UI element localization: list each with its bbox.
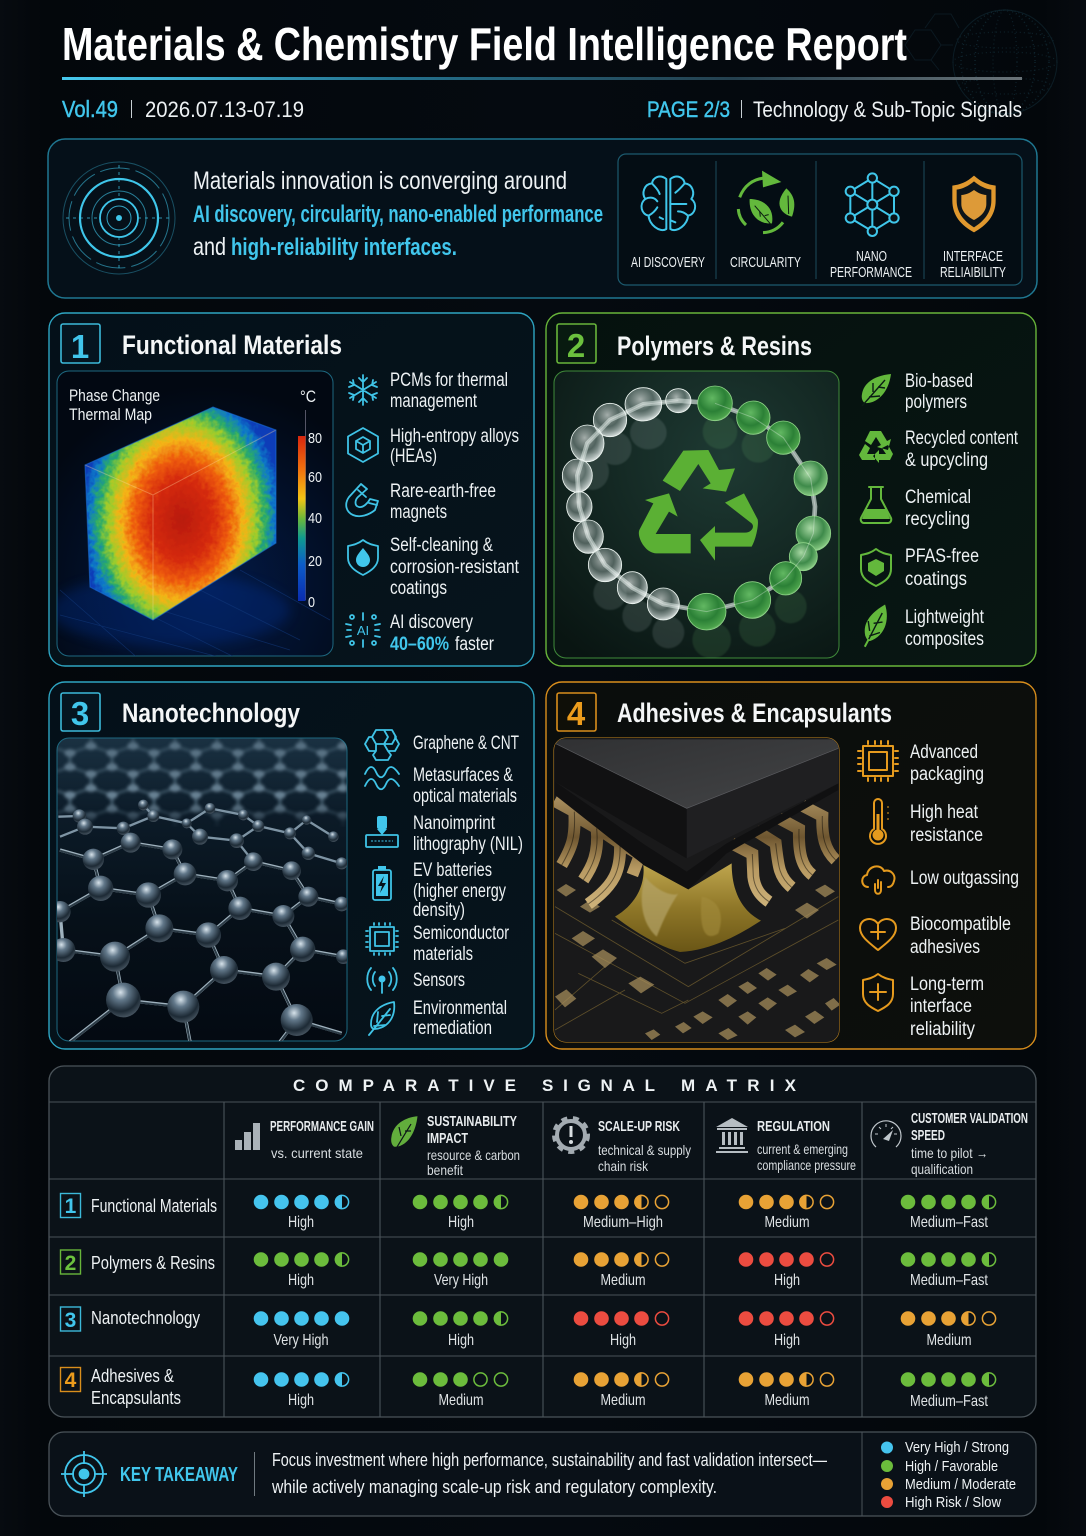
text: environmental: Environmental — [413, 998, 507, 1019]
title: Materials & Chemistry Field Intelligence Report — [62, 18, 907, 70]
label: circularity: CIRCULARITY — [730, 255, 801, 271]
color scale legend: 80 — [308, 430, 322, 447]
column header: scale-up risk — [554, 1118, 691, 1174]
text: metasurfaces: Metasurfaces & — [413, 765, 513, 786]
meta line: volume and date: Vol.49 — [62, 96, 118, 122]
text: AI discovery — [390, 612, 495, 655]
row: Polymers & Resins: Very High — [434, 1272, 488, 1289]
icon: leaf — [862, 374, 891, 406]
icon: waves — [365, 767, 399, 789]
number badge 4 — [557, 693, 596, 732]
text: composites — [905, 607, 985, 650]
text: high heat: High heat — [910, 802, 979, 823]
row: Adhesives & Encapsulants: High — [288, 1392, 314, 1409]
number badge 2 — [557, 324, 596, 364]
text: recycled: Recycled content — [905, 428, 1019, 449]
summary text: Materials innovation is converging around — [193, 167, 567, 195]
lead edges — [562, 812, 836, 904]
bead string — [577, 401, 815, 612]
column header: scale-up risk: chain risk — [598, 1158, 649, 1174]
text: AI discovery: 40–60% — [390, 634, 449, 655]
text: PCMs — [390, 370, 508, 412]
column header: regulation — [716, 1118, 856, 1173]
icon: shield plus — [863, 974, 893, 1011]
text: low outgassing: Low outgassing — [910, 868, 1019, 889]
text: graphene: Graphene & CNT — [413, 733, 519, 754]
text: bio-based: Bio-based — [905, 371, 973, 392]
panel 3: Nanotechnology — [49, 682, 534, 1049]
row: Adhesives & Encapsulants: Medium — [764, 1392, 810, 1409]
text: biocompatible: Biocompatible — [910, 914, 1011, 935]
row: Adhesives & Encapsulants: 4 — [65, 1369, 77, 1392]
thermal map image — [50, 371, 333, 660]
panel 4: Adhesives & Encapsulants — [546, 682, 1036, 1049]
panel: executive summary — [48, 139, 1037, 298]
column header: performance gain — [235, 1119, 374, 1161]
text: AI discovery: AI discovery — [390, 612, 473, 633]
row: Polymers & Resins: High — [774, 1272, 800, 1289]
column header: customer validation speed: SPEED — [911, 1128, 945, 1144]
row: Nanotechnology: High — [448, 1332, 474, 1349]
text: semiconductor: Semiconductor — [413, 923, 510, 944]
heading: Polymers & Resins — [617, 331, 812, 361]
icon: magnet — [346, 484, 378, 516]
icon: nanoimprint stamp — [366, 816, 398, 847]
text: PCMs: PCMs for thermal — [390, 370, 508, 391]
label: nano performance — [830, 249, 912, 281]
graphene lattice image — [49, 738, 351, 1042]
panel: key takeaway and legend — [49, 1432, 1036, 1516]
text: advanced packaging: packaging — [910, 764, 984, 785]
row: Adhesives & Encapsulants: Medium — [438, 1392, 484, 1409]
legend: Medium / Moderate — [905, 1476, 1016, 1493]
label: interface reliability — [940, 249, 1006, 281]
text: high heat: resistance — [910, 825, 983, 846]
row: Adhesives & Encapsulants: Adhesives & — [91, 1366, 174, 1386]
circuit traces — [555, 897, 838, 1030]
icon: hexagon alloy cube — [348, 428, 378, 462]
row: Functional Materials: High — [288, 1214, 314, 1231]
label: interface reliability: RELIAIBILITY — [940, 265, 1006, 281]
text: PFAS: coatings — [905, 569, 967, 590]
chip second tier — [555, 782, 838, 889]
icon: graphene rings — [365, 730, 399, 760]
icon: AI circuit: AI — [357, 623, 369, 638]
row: Nanotechnology: Very High — [274, 1332, 328, 1349]
column header: regulation: REGULATION — [757, 1119, 830, 1135]
text: long-term reliability: Long-term — [910, 974, 984, 995]
matrix title — [293, 1076, 797, 1095]
text: coatings: Self-cleaning & — [390, 535, 493, 556]
takeaway text: Focus investment where high performance, sustainability and fast validation intersect— — [272, 1449, 827, 1470]
row: Adhesives & Encapsulants: Medium — [600, 1392, 646, 1409]
text: long-term reliability: reliability — [910, 1019, 975, 1040]
column header: performance gain: vs. current state — [271, 1145, 363, 1161]
legend — [881, 1439, 1016, 1511]
summary text — [193, 167, 603, 261]
icon: PFAS shield — [861, 549, 891, 586]
text: biocompatible: adhesives — [910, 937, 980, 958]
color scale legend: 0 — [308, 594, 315, 611]
text: high heat — [910, 802, 983, 846]
text: PFAS: PFAS-free — [905, 546, 979, 567]
legend: High Risk / Slow — [905, 1494, 1001, 1511]
recycling symbol — [639, 450, 758, 561]
row: Polymers & Resins: High — [288, 1272, 314, 1289]
icon: cloud outgassing — [862, 866, 894, 894]
color scale legend — [298, 387, 322, 611]
icon: recycle arrows — [859, 431, 893, 463]
summary text: and — [193, 233, 226, 261]
text: composites: Lightweight — [905, 607, 985, 628]
column header: customer validation speed: time to pilot → — [911, 1145, 988, 1161]
row: Polymers & Resins — [60, 1250, 996, 1289]
legend: High / Favorable — [905, 1458, 998, 1475]
row: Functional Materials: 1 — [65, 1195, 77, 1218]
text: long-term reliability — [910, 974, 984, 1040]
heading: Functional Materials — [122, 330, 342, 360]
column header: performance gain: PERFORMANCE GAIN — [270, 1119, 374, 1135]
text: recycled — [905, 428, 1019, 471]
text: environmental — [413, 998, 507, 1039]
number badge 3: 3 — [71, 695, 89, 732]
icon: composite leaf — [859, 604, 891, 647]
text: HEAs — [390, 426, 519, 467]
text: nanoimprint: Nanoimprint — [413, 813, 496, 834]
label: AI discovery: AI DISCOVERY — [631, 255, 705, 271]
text: coatings: corrosion-resistant — [390, 557, 520, 578]
text: nanoimprint: lithography (NIL) — [413, 834, 523, 855]
row: Functional Materials: Medium–Fast — [910, 1214, 988, 1231]
icon strip — [618, 154, 1022, 285]
color scale legend: 20 — [308, 553, 322, 570]
row: Nanotechnology: 3 — [65, 1309, 76, 1332]
icon: environmental leaf — [369, 1002, 394, 1035]
column header: sustainability impact — [391, 1114, 520, 1178]
text: long-term reliability: interface — [910, 996, 972, 1017]
text: EV batteries: (higher energy — [413, 881, 506, 902]
row: Nanotechnology — [60, 1307, 996, 1349]
column header: customer validation speed: qualification — [911, 1161, 973, 1177]
matrix title: MATRIX — [681, 1076, 797, 1095]
icon: nano network — [846, 173, 899, 236]
meta line: page and topic — [647, 97, 1022, 122]
column header: scale-up risk: technical & supply — [598, 1142, 691, 1158]
text: PCMs: management — [390, 391, 478, 412]
icon: radar target — [63, 162, 175, 274]
row: Adhesives & Encapsulants — [60, 1366, 996, 1410]
summary text: AI discovery, circularity, nano-enabled performance — [193, 201, 603, 228]
meta line: page and topic: PAGE 2/3 — [647, 97, 730, 122]
package — [555, 739, 838, 808]
text: magnets: Rare-earth-free — [390, 481, 496, 502]
text: chemical — [905, 487, 971, 530]
summary text: high-reliability interfaces. — [231, 234, 457, 261]
column header: sustainability impact: resource & carbon — [427, 1147, 520, 1163]
row: Polymers & Resins: Medium–Fast — [910, 1272, 988, 1289]
chart caption: Thermal Map — [69, 405, 152, 424]
number badge 4: 4 — [567, 695, 586, 732]
key takeaway label: KEY TAKEAWAY — [120, 1464, 238, 1486]
column header: sustainability impact: benefit — [427, 1162, 463, 1178]
row: Polymers & Resins: Polymers & Resins — [91, 1253, 215, 1273]
text: PFAS — [905, 546, 979, 590]
text: HEAs: High-entropy alloys — [390, 426, 519, 447]
heading: Adhesives & Encapsulants — [617, 698, 892, 728]
row: Functional Materials: High — [448, 1214, 474, 1231]
color scale legend: 40 — [308, 510, 322, 527]
panel 1: Functional Materials — [49, 313, 534, 666]
label: nano performance: NANO — [856, 249, 887, 265]
text: sensors: Sensors — [413, 970, 465, 991]
column header: customer validation speed — [871, 1111, 1028, 1177]
polymer bead ring image — [554, 371, 839, 658]
row: Adhesives & Encapsulants: Medium–Fast — [910, 1393, 988, 1410]
text: EV batteries: EV batteries — [413, 860, 492, 881]
text: semiconductor: materials — [413, 944, 473, 965]
decorative globe: top right — [905, 10, 1057, 114]
row: Functional Materials: Functional Materials — [91, 1196, 217, 1216]
meta line: volume and date: 2026.07.13-07.19 — [145, 97, 304, 122]
icon: advanced packaging chip — [858, 741, 898, 781]
row: Nanotechnology: Medium — [926, 1332, 972, 1349]
chart caption: Phase Change — [69, 386, 160, 405]
column header: sustainability impact: SUSTAINABILITY — [427, 1114, 517, 1130]
matrix title: SIGNAL — [542, 1076, 655, 1095]
text: metasurfaces — [413, 765, 517, 807]
icon: battery — [373, 866, 391, 900]
text: magnets — [390, 481, 496, 523]
chart caption — [69, 386, 160, 424]
panel 2: Polymers & Resins — [546, 313, 1036, 666]
column header: customer validation speed: CUSTOMER VALIDATION — [911, 1111, 1028, 1127]
text: biocompatible — [910, 914, 1011, 958]
text: AI discovery: faster — [455, 634, 495, 655]
row: Adhesives & Encapsulants: Encapsulants — [91, 1388, 181, 1408]
text: composites: composites — [905, 629, 984, 650]
text: coatings: coatings — [390, 578, 447, 599]
row: Functional Materials: Medium — [764, 1214, 810, 1231]
text: EV batteries — [413, 860, 506, 921]
icon: interface shield — [952, 176, 996, 232]
row: Functional Materials: Medium–High — [583, 1214, 663, 1231]
icon: snowflake — [349, 375, 377, 405]
row: Nanotechnology: High — [610, 1332, 636, 1349]
text: semiconductor — [413, 923, 510, 965]
column header: regulation: compliance pressure — [757, 1157, 856, 1173]
icon: AI circuit — [346, 613, 380, 647]
text: advanced packaging — [910, 742, 984, 785]
column header: sustainability impact: IMPACT — [427, 1131, 468, 1147]
number badge 2: 2 — [567, 327, 585, 364]
meta line: page and topic: Technology & Sub-Topic Signals — [753, 97, 1022, 122]
number badge 1: 1 — [71, 328, 89, 365]
bonds — [60, 843, 343, 1042]
icon: flask — [861, 487, 891, 523]
chip encapsulant image — [552, 737, 842, 1043]
text: recycled: & upcycling — [905, 450, 988, 471]
text: chemical: recycling — [905, 509, 970, 530]
title underline — [62, 77, 1022, 80]
label: nano performance: PERFORMANCE — [830, 265, 912, 281]
row: Polymers & Resins: 2 — [65, 1252, 76, 1275]
row: Polymers & Resins: Medium — [600, 1272, 646, 1289]
icon: key takeaway target — [61, 1451, 107, 1497]
text: bio-based — [905, 371, 973, 413]
text: nanoimprint — [413, 813, 523, 855]
icon: semiconductor chip — [366, 923, 398, 955]
color scale legend: 60 — [308, 469, 322, 486]
matrix title: COMPARATIVE — [293, 1076, 516, 1095]
row: Functional Materials — [60, 1194, 996, 1231]
text: advanced packaging: Advanced — [910, 742, 978, 763]
label: interface reliability: INTERFACE — [943, 249, 1003, 265]
heading: Nanotechnology — [122, 698, 300, 728]
text: HEAs: (HEAs) — [390, 446, 437, 467]
text: bio-based: polymers — [905, 392, 967, 413]
icon: shield drop — [348, 540, 378, 575]
number badge 3 — [61, 693, 100, 732]
text: chemical: Chemical — [905, 487, 971, 508]
meta line: volume and date — [62, 96, 304, 122]
column header: scale-up risk: SCALE-UP RISK — [598, 1119, 680, 1135]
icon: circularity — [738, 171, 794, 233]
text: metasurfaces: optical materials — [413, 786, 517, 807]
icon: heart plus — [860, 919, 896, 950]
text: magnets: magnets — [390, 502, 447, 523]
column header: regulation: current & emerging — [757, 1141, 848, 1157]
panel: comparative signal matrix — [49, 1066, 1036, 1417]
takeaway text — [271, 1449, 827, 1497]
solder pads — [555, 884, 840, 1040]
number badge 1 — [61, 324, 100, 365]
takeaway text: while actively managing scale-up risk and regulatory complexity. — [271, 1476, 717, 1497]
legend: Very High / Strong — [905, 1439, 1009, 1456]
text: coatings — [390, 535, 520, 599]
glue — [615, 863, 761, 952]
row: Nanotechnology: High — [774, 1332, 800, 1349]
row: Nanotechnology: Nanotechnology — [91, 1308, 200, 1328]
icon: sensor signal — [367, 968, 397, 993]
icon: thermometer — [870, 799, 889, 844]
metal leads behind package — [554, 801, 836, 904]
text: environmental: remediation — [413, 1018, 492, 1039]
text: EV batteries: density) — [413, 900, 465, 921]
color scale legend: °C — [300, 387, 316, 406]
icon: AI discovery brain — [642, 177, 695, 230]
